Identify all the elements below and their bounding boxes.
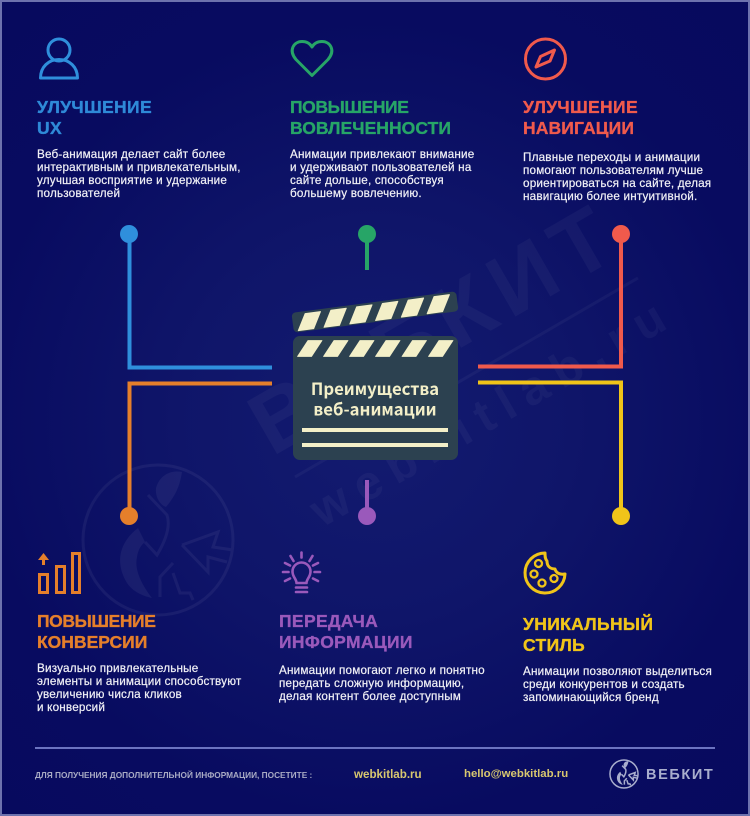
heading: improve UX <box>36 97 152 138</box>
text: unique style: Анимации позволяют выделиться <box>523 665 712 678</box>
footer label: ДЛЯ ПОЛУЧЕНИЯ ДОПОЛНИТЕЛЬНОЙ ИНФОРМАЦИИ, ПОСЕТИТЕ : <box>35 770 312 780</box>
heading: improve UX: UX <box>37 118 62 138</box>
heading: conversion: КОНВЕРСИИ <box>37 632 147 652</box>
text: improve UX: улучшая восприятие и удержание <box>37 174 227 187</box>
text: engagement <box>290 148 474 200</box>
text: engagement: большему вовлечению. <box>290 187 422 200</box>
clapperboard: веб-анимации <box>313 396 437 420</box>
text: engagement: и удерживают пользователей на <box>290 161 472 174</box>
text: navigation <box>523 151 711 203</box>
text: unique style <box>522 665 712 704</box>
text: information: Анимации помогают легко и понятно <box>279 664 485 677</box>
text: navigation: помогают пользователям лучше <box>523 164 703 177</box>
clapperboard title: Преимущества <box>311 376 439 400</box>
text: improve UX: Веб-анимация делает сайт более <box>37 148 225 161</box>
text: engagement: Анимации привлекают внимание <box>290 148 474 161</box>
heading: conversion <box>37 611 156 652</box>
footer website: webkitlab.ru <box>354 768 422 781</box>
text: information <box>278 664 485 703</box>
text: improve UX: пользователей <box>37 187 120 200</box>
heading: improve UX: УЛУЧШЕНИЕ <box>37 97 152 117</box>
text: conversion: элементы и анимации способствуют <box>37 674 241 688</box>
background watermark: ВЕБКИТ <box>232 183 637 473</box>
heading: unique style <box>522 614 653 655</box>
text: navigation: Плавные переходы и анимации <box>523 151 700 164</box>
text: improve UX <box>36 148 241 200</box>
text: improve UX: интерактивным и привлекательным, <box>37 161 241 174</box>
heading: navigation <box>522 97 638 138</box>
text: conversion: и конверсий <box>37 700 105 714</box>
heading: information: ИНФОРМАЦИИ <box>279 632 413 652</box>
heading: conversion: ПОВЫШЕНИЕ <box>37 611 156 631</box>
footer email: hello@webkitlab.ru <box>464 768 568 780</box>
text: conversion <box>36 662 242 714</box>
text: navigation: навигацию более интуитивной. <box>523 190 697 203</box>
footer brand name: ВЕБКИТ <box>646 767 714 783</box>
footer divider <box>35 747 715 749</box>
heading: navigation: УЛУЧШЕНИЕ <box>523 97 638 117</box>
text: engagement: сайте дольше, способствуя <box>290 174 444 187</box>
heading: unique style: УНИКАЛЬНЫЙ <box>523 614 653 634</box>
text: navigation: ориентироваться на сайте, делая <box>523 177 711 190</box>
text: conversion: увеличению числа кликов <box>37 688 182 700</box>
text: unique style: запоминающийся бренд <box>523 691 659 704</box>
heading: engagement: ВОВЛЕЧЕННОСТИ <box>290 118 451 138</box>
heading: information: ПЕРЕДАЧА <box>279 611 378 631</box>
text: conversion: Визуально привлекательные <box>37 662 198 674</box>
text: information: делая контент более доступным <box>279 690 461 703</box>
heading: navigation: НАВИГАЦИИ <box>523 118 634 138</box>
text: information: передать сложную информацию, <box>279 677 464 690</box>
heading: engagement <box>290 97 451 138</box>
text: unique style: среди конкурентов и создать <box>523 678 685 691</box>
heading: unique style: СТИЛЬ <box>523 635 585 655</box>
heading: engagement: ПОВЫШЕНИЕ <box>290 97 409 117</box>
background watermark: webkitlab.ru <box>300 286 684 538</box>
heading: information <box>279 611 413 652</box>
